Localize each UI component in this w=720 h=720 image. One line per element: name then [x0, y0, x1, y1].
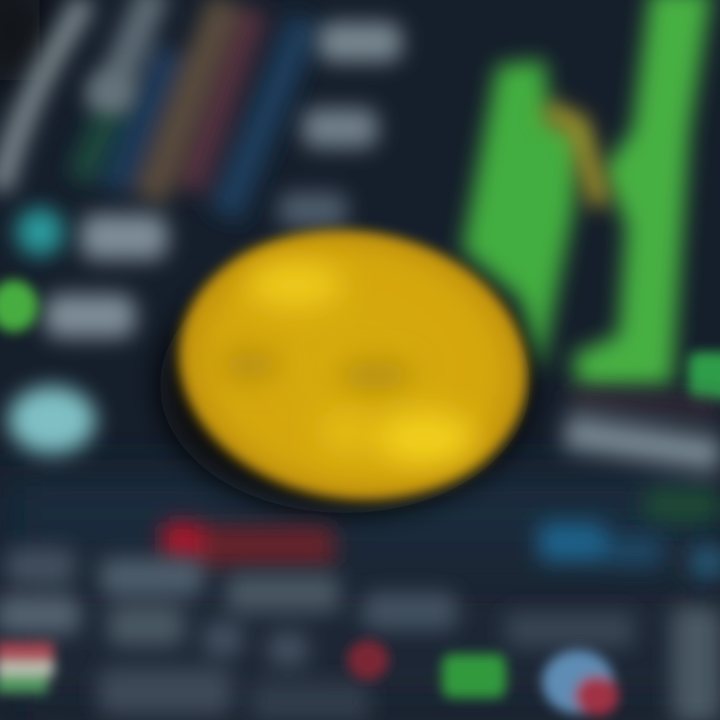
- icon: flag stripes: [0, 642, 54, 693]
- panel: right side label bar: [565, 398, 720, 522]
- panel: lower table of blurred labels: [0, 548, 720, 720]
- panel: blurred grey text labels, upper: [44, 22, 402, 338]
- coin highlights: [220, 263, 475, 464]
- green bar far right: [688, 352, 720, 400]
- icon: red dot: [347, 640, 389, 680]
- icon: green badge: [442, 654, 506, 698]
- green bar left: [462, 60, 582, 375]
- icon: pale teal oval: [8, 386, 96, 454]
- icon: gold coin: [161, 208, 545, 522]
- coin shadow: [160, 257, 530, 513]
- icon: blue and red badge: [542, 650, 619, 716]
- panel: ticker strip: [162, 522, 720, 579]
- orange wick: [545, 110, 600, 205]
- icon: green dot: [0, 280, 38, 332]
- green bar right: [572, 0, 712, 388]
- chart: green candlestick bars: [462, 0, 720, 400]
- panel: left diagonal column lines: [0, 0, 305, 215]
- icon: teal dot: [16, 208, 64, 256]
